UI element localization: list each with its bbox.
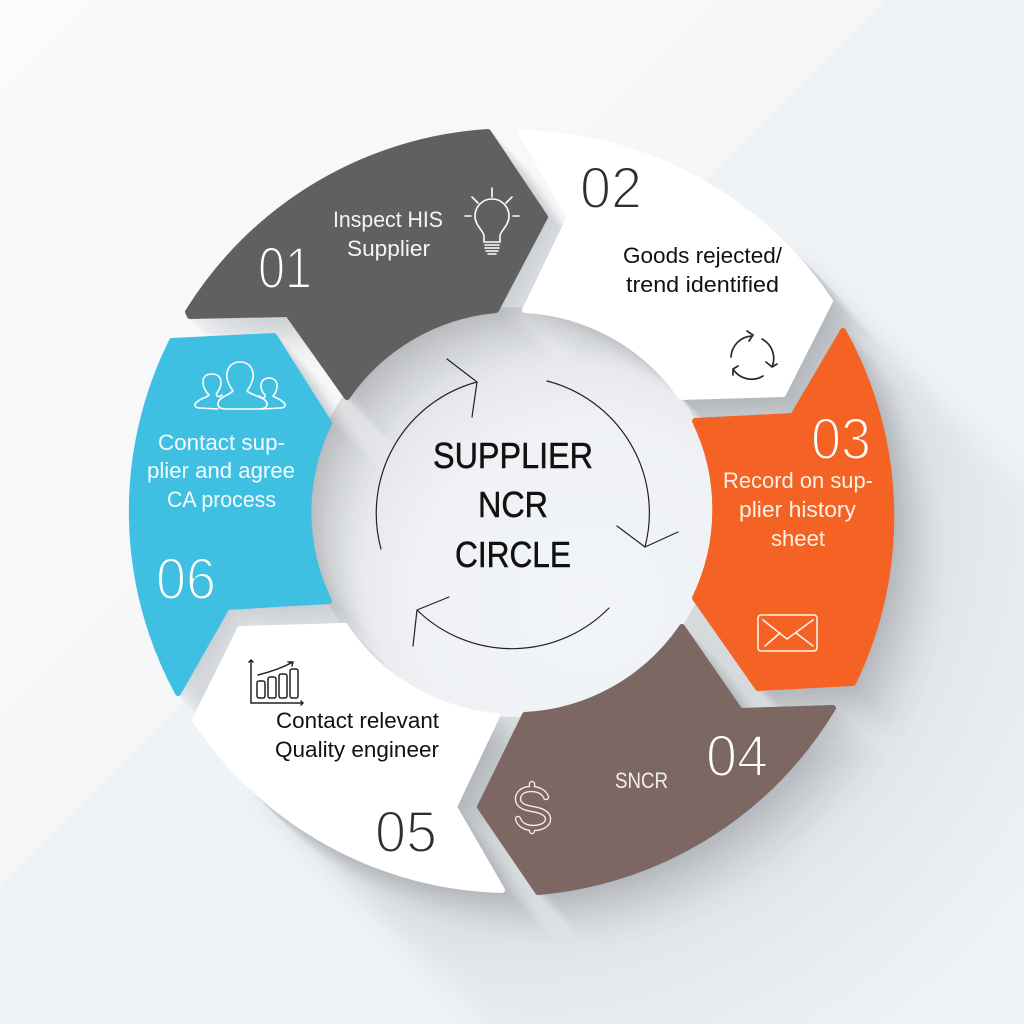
panel: step 06 <box>132 336 329 693</box>
segment shape 06 <box>132 336 329 693</box>
label 01: Supplier <box>347 236 430 261</box>
label 03: sheet <box>771 526 825 551</box>
label 03 <box>723 468 873 551</box>
segment shape 02 <box>521 133 830 397</box>
panel: step 02 <box>521 133 830 397</box>
icon: envelope <box>758 615 817 651</box>
title: CIRCLE <box>455 534 571 575</box>
label 04: SNCR <box>615 768 668 793</box>
panel: step 03 <box>695 331 891 688</box>
icon: dollar sign <box>518 784 548 831</box>
title <box>433 435 593 575</box>
label 01: Inspect HIS <box>333 207 443 232</box>
label 02: trend identified <box>626 272 779 297</box>
icon: bar chart <box>249 660 303 705</box>
center disc <box>307 307 717 717</box>
title: SUPPLIER <box>433 435 593 476</box>
segment drop shadows <box>134 134 941 942</box>
number 05: 05 <box>375 800 437 865</box>
arrow: right to bottom left <box>413 597 609 649</box>
panel: step 05 <box>195 626 502 890</box>
long shadow of the circle <box>262 262 1024 1024</box>
segment shape 01 <box>188 132 545 397</box>
arrow: left to top <box>376 359 477 549</box>
label 05: Contact relevant <box>276 708 439 733</box>
panel: step 04 <box>480 627 833 892</box>
label 06: Contact sup- <box>158 430 285 455</box>
label 02: Goods rejected/ <box>623 243 783 268</box>
segment shape 03 <box>695 331 891 688</box>
panel: step 01 <box>188 132 545 397</box>
segment shape 04 <box>480 627 833 892</box>
icon: light bulb <box>465 188 519 254</box>
segment shape 05 <box>195 626 502 890</box>
label 02 <box>623 243 783 297</box>
label 06: CA process <box>167 487 276 512</box>
label 01 <box>333 207 443 261</box>
icon: recycle arrows <box>731 331 777 379</box>
number 04: 04 <box>706 724 768 789</box>
label 05 <box>275 708 439 762</box>
number 06: 06 <box>156 547 216 612</box>
label 06: plier and agree <box>147 458 295 483</box>
label 06 <box>147 430 295 512</box>
icon: people <box>195 362 285 409</box>
arrow: top to right <box>547 381 678 547</box>
label 03: plier history <box>739 497 856 522</box>
label 05: Quality engineer <box>275 737 439 762</box>
number 02: 02 <box>580 156 642 221</box>
number 03: 03 <box>811 407 871 472</box>
center circular arrows <box>376 359 678 649</box>
number 01: 01 <box>258 236 312 301</box>
label 03: Record on sup- <box>723 468 873 493</box>
title: NCR <box>478 484 548 525</box>
